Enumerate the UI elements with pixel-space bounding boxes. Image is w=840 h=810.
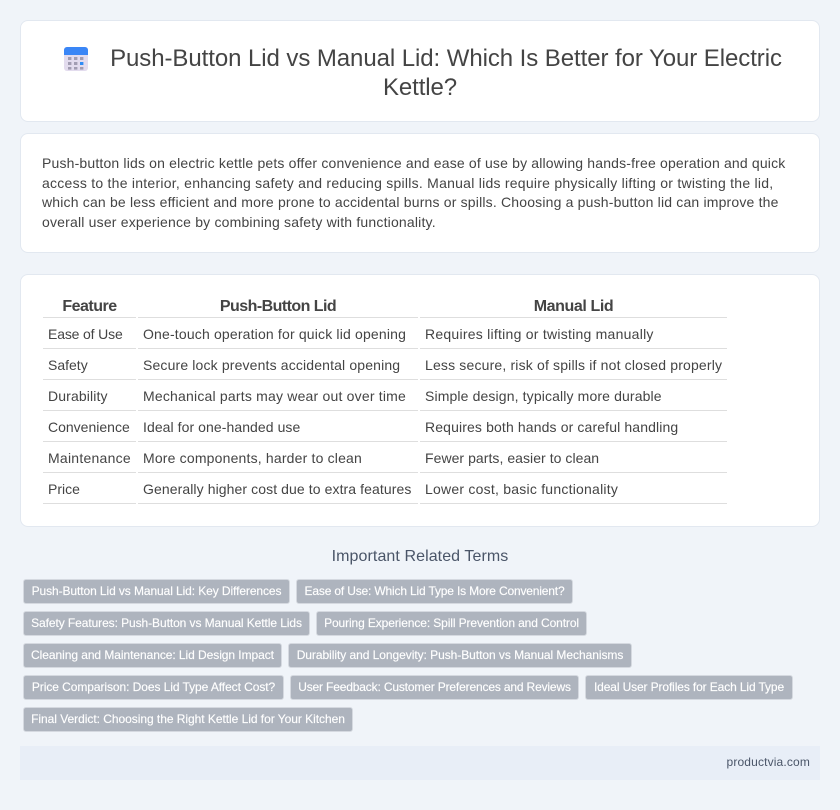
row: ease of use: One-touch operation for quick lid opening [143,326,406,342]
footer [20,746,820,780]
tag [23,707,353,732]
row: durability [48,388,662,404]
row: safety: Less secure, risk of spills if not closed properly [425,357,722,373]
row: convenience [48,419,678,435]
title: Kettle? [383,74,457,101]
tag [23,643,282,668]
table header: push-button lid: Push-Button Lid [220,298,336,315]
table header: feature: Feature [62,298,117,315]
row: convenience: Requires both hands or careful handling [425,419,678,435]
tag [23,611,310,636]
row: maintenance: More components, harder to clean [143,450,362,466]
row: price [48,481,618,497]
tag: Price Comparison: Does Lid Type Affect Cost? [32,680,275,694]
row: convenience: Ideal for one-handed use [143,419,300,435]
tag [290,675,579,700]
title [110,45,782,101]
tag [585,675,793,700]
footer source text: productvia.com [727,755,810,769]
row: convenience: Convenience [48,419,130,435]
tag: Push-Button Lid vs Manual Lid: Key Differences [32,584,281,598]
panel: comparison table [20,274,820,527]
tag: Pouring Experience: Spill Prevention and Control [324,616,579,630]
row: durability: Simple design, typically more durable [425,388,662,404]
related terms tags [23,579,793,732]
row: price: Lower cost, basic functionality [425,481,618,497]
tag: Cleaning and Maintenance: Lid Design Impact [31,648,274,662]
tag: Durability and Longevity: Push-Button vs Manual Mechanisms [297,648,623,662]
tag: Final Verdict: Choosing the Right Kettle Lid for Your Kitchen [31,712,345,726]
row: price: Generally higher cost due to extra features [143,481,411,497]
row: durability: Mechanical parts may wear out over time [143,388,406,404]
row: safety: Secure lock prevents accidental opening [143,357,400,373]
intro paragraph: Push-button lids on electric kettle pets offer convenience and ease of use by allowing hands-free operation and quick [42,155,785,171]
row: maintenance: Maintenance [48,450,131,466]
tag: Ease of Use: Which Lid Type Is More Convenient? [305,584,564,598]
heading: important related terms: Important Related Terms [332,548,508,565]
row: safety [48,357,722,373]
tag: Safety Features: Push-Button vs Manual Kettle Lids [31,616,302,630]
row: ease of use: Ease of Use [48,326,123,342]
row: price: Price [48,481,80,497]
header panel [20,20,820,122]
tag [288,643,632,668]
tag: User Feedback: Customer Preferences and Reviews [298,680,571,694]
intro paragraph [42,155,786,230]
tag: Ideal User Profiles for Each Lid Type [594,680,784,694]
icon: calendar [64,47,88,71]
row: safety: Safety [48,357,88,373]
row: maintenance [48,450,599,466]
title: Push-Button Lid vs Manual Lid: Which Is Better for Your Electric [110,45,782,72]
tag [296,579,573,604]
tag [316,611,587,636]
panel: intro text [20,133,820,253]
intro paragraph: overall user experience by combining safety with functionality. [42,214,436,230]
intro paragraph: which can be less efficient and more prone to accidental burns or spills. Choosing a push-button lid can improve the [42,194,779,210]
row: ease of use [48,326,654,342]
row: ease of use: Requires lifting or twisting manually [425,326,654,342]
table header: manual lid: Manual Lid [534,298,613,315]
intro paragraph: access to the interior, enhancing safety and reducing spills. Manual lids require physically lifting or twisting the lid, [42,175,773,191]
row: durability: Durability [48,388,108,404]
row: maintenance: Fewer parts, easier to clean [425,450,599,466]
tag [23,675,284,700]
tag [23,579,290,604]
